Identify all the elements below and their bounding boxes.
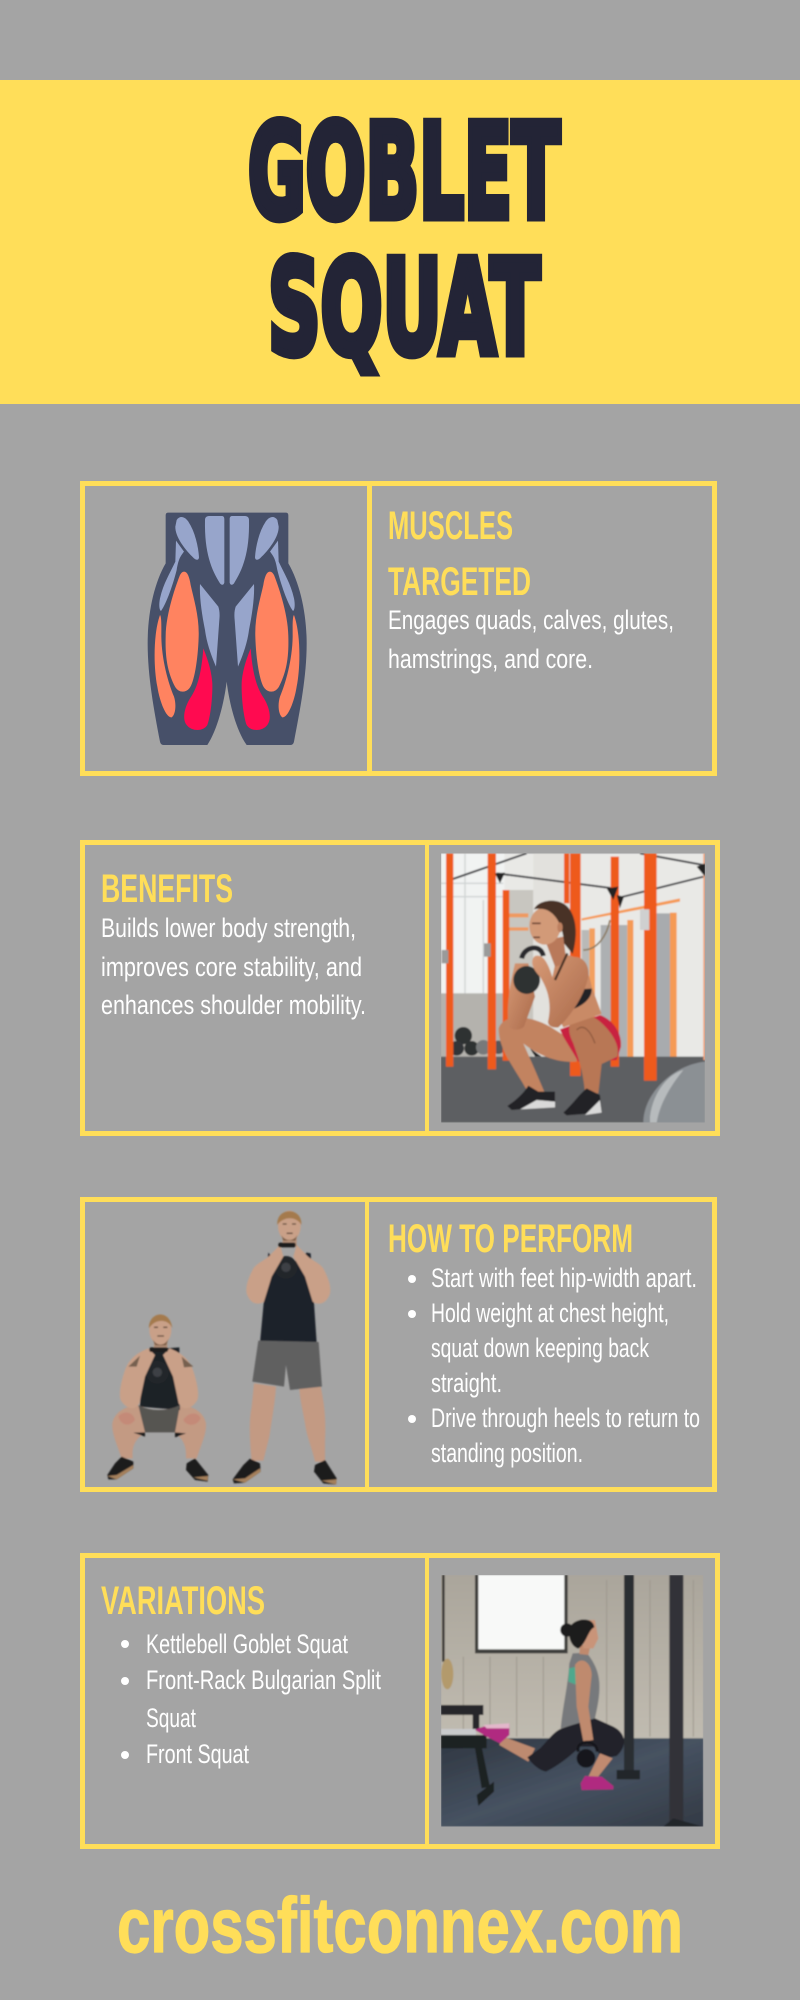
list: how to perform steps: Start with feet hip-width apart. <box>431 1263 697 1293</box>
leggings <box>527 1718 624 1772</box>
shoes <box>107 1457 133 1479</box>
heading: variations: VARIATIONS <box>101 1579 265 1623</box>
panel: benefits <box>82 840 718 1136</box>
heading: muscles targeted: MUSCLES <box>388 504 513 548</box>
shorts <box>560 1015 621 1062</box>
head and hair <box>529 907 561 945</box>
shorts <box>252 1341 322 1390</box>
text: muscles description <box>388 605 674 674</box>
shoes <box>507 1086 555 1110</box>
icon: thigh muscles diagram <box>148 513 307 745</box>
text: benefits description: Builds lower body strength, <box>101 913 356 943</box>
text: benefits description: improves core stability, and <box>101 952 362 982</box>
near arm <box>532 956 589 1028</box>
far arm <box>508 963 535 1030</box>
shoes <box>233 1459 261 1483</box>
list: how to perform steps <box>408 1263 700 1468</box>
arms <box>246 1245 283 1304</box>
kettlebell <box>146 1361 169 1384</box>
back shoe <box>475 1724 509 1743</box>
standing figure <box>233 1211 337 1485</box>
back shin <box>499 1736 535 1762</box>
kettlebell <box>522 948 543 958</box>
list: variations: Front Squat <box>146 1739 249 1769</box>
near leg <box>569 1015 618 1093</box>
list: how to perform steps: straight. <box>431 1368 502 1398</box>
heading: how to perform: HOW TO PERFORM <box>388 1217 633 1261</box>
arm <box>575 1661 593 1742</box>
list: how to perform steps: squat down keeping back <box>431 1333 649 1363</box>
text: muscles description: hamstrings, and core. <box>388 644 593 674</box>
kettlebell <box>275 1256 297 1279</box>
text: benefits description <box>101 913 366 1020</box>
heading: muscles targeted <box>388 504 531 604</box>
panel: muscles targeted <box>82 481 714 776</box>
head <box>154 1340 167 1349</box>
list: variations <box>121 1629 381 1769</box>
panel: how to perform <box>82 1197 714 1492</box>
list: variations: Front-Rack Bulgarian Split <box>146 1665 381 1695</box>
list: how to perform steps: Hold weight at chest height, <box>431 1298 669 1328</box>
neck <box>545 937 567 967</box>
arms <box>120 1348 155 1408</box>
squatting figure <box>107 1315 208 1482</box>
legs <box>250 1383 276 1461</box>
torso <box>548 955 602 1027</box>
photo: woman doing kettlebell split squat <box>441 1575 703 1827</box>
title: goblet squat: SQUAT <box>268 232 540 384</box>
heading: benefits: BENEFITS <box>101 867 233 911</box>
title: goblet squat <box>248 96 560 384</box>
list: how to perform steps: standing position. <box>431 1438 583 1468</box>
list: variations: Squat <box>146 1703 196 1733</box>
list: how to perform steps: Drive through heels to return to <box>431 1403 700 1433</box>
legs <box>112 1406 145 1458</box>
torso <box>561 1653 600 1728</box>
text: benefits description: enhances shoulder mobility. <box>101 990 366 1020</box>
list: variations: Kettlebell Goblet Squat <box>146 1629 348 1659</box>
title banner <box>0 80 800 404</box>
panel: variations <box>82 1553 718 1849</box>
ball <box>643 1062 705 1123</box>
tank <box>140 1347 180 1410</box>
heading: muscles targeted: TARGETED <box>388 560 531 604</box>
tank <box>260 1253 317 1343</box>
shorts <box>138 1405 180 1432</box>
front shin and shoe <box>588 1753 613 1779</box>
text: muscles description: Engages quads, calves, glutes, <box>388 605 674 635</box>
head <box>579 1645 591 1655</box>
head <box>283 1237 297 1247</box>
kettlebell <box>577 1749 595 1768</box>
photo: man performing goblet squat, squatting and standing <box>107 1211 337 1485</box>
photo: woman doing kettlebell goblet squat in gym <box>441 853 705 1123</box>
far leg <box>499 1017 577 1093</box>
